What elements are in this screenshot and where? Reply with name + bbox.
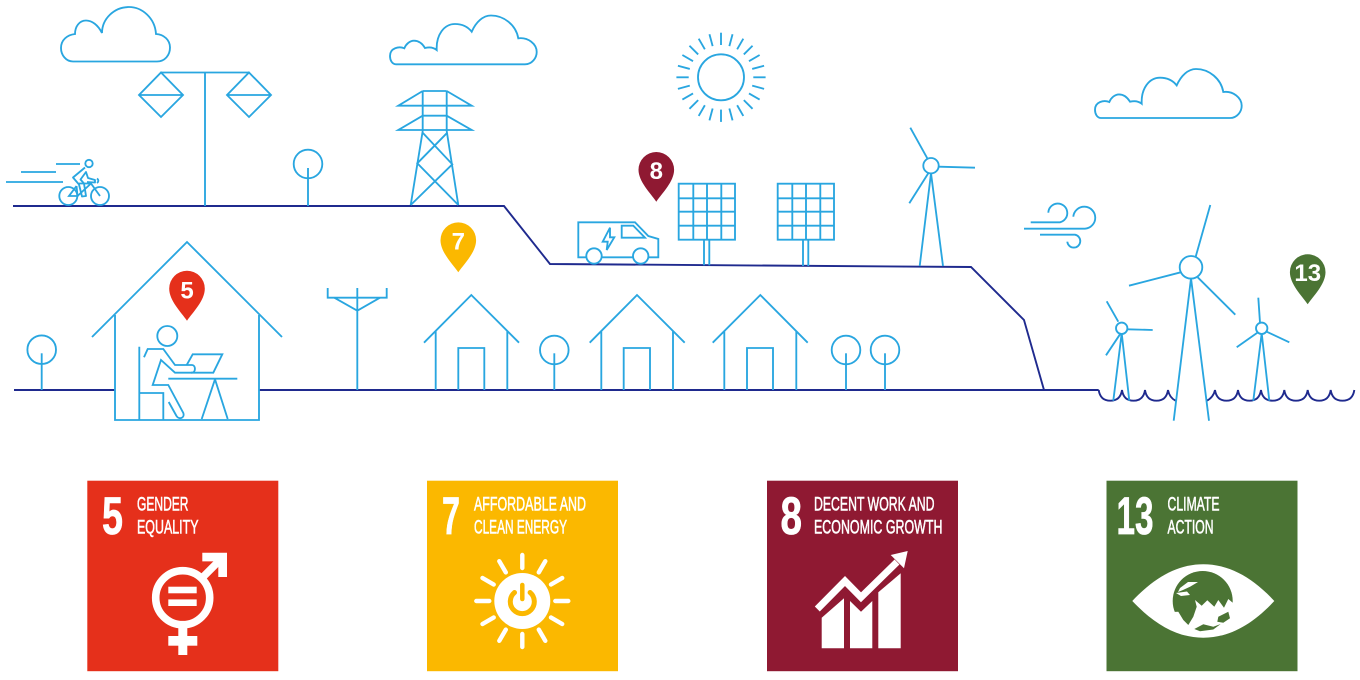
goal title: AFFORDABLE AND — [474, 495, 586, 516]
icon: utility pole — [328, 288, 387, 390]
icon: solar panel 1 — [679, 184, 735, 265]
map pin: goal 5 — [169, 271, 205, 321]
map pin: goal 8: 8 — [650, 158, 663, 185]
panel: SDG 8 decent work and economic growth — [767, 481, 958, 671]
goal title: EQUALITY — [137, 517, 199, 538]
icon: sun — [676, 33, 766, 122]
goal title — [137, 495, 199, 538]
icon: electricity pylon — [398, 91, 472, 205]
goal number 5: 5 — [102, 487, 123, 546]
icon: cyclist with speed lines — [6, 160, 109, 205]
icon: offshore turbine small right — [1237, 298, 1289, 401]
icon: offshore turbine small left — [1106, 301, 1153, 401]
goal title: ACTION — [1168, 517, 1214, 538]
icon: sun with power button — [476, 555, 568, 647]
goal title: GENDER — [137, 495, 188, 516]
goal title — [1168, 495, 1220, 538]
ground line: upper terrain — [13, 206, 1099, 390]
map pin: goal 5: 5 — [180, 277, 194, 304]
goal title: DECENT WORK AND — [814, 495, 934, 516]
map pin: goal 8 — [638, 152, 674, 202]
goal number 13: 13 — [1116, 487, 1154, 546]
panel: SDG 5 gender equality — [87, 481, 278, 671]
icon: woman working in house — [92, 242, 282, 420]
cloud: centre — [390, 16, 537, 64]
icon: tree left — [27, 335, 56, 390]
icon: wind gust — [1024, 204, 1095, 248]
map pin: goal 13: 13 — [1294, 260, 1321, 287]
icon: eye with globe — [1132, 564, 1274, 638]
goal title: CLIMATE — [1168, 495, 1220, 516]
waves — [1099, 390, 1354, 401]
goal title: CLEAN ENERGY — [474, 517, 567, 538]
panel: SDG 13 climate action — [1106, 481, 1298, 671]
icon: tree by lamp — [294, 150, 322, 206]
map pin: goal 7 — [440, 222, 476, 272]
icon: growth chart — [817, 551, 908, 648]
icon: offshore turbine large — [1129, 205, 1235, 421]
cloud: right — [1095, 69, 1242, 118]
map pin: goal 7: 7 — [452, 228, 465, 256]
map pin: goal 13 — [1290, 254, 1326, 304]
goal title — [474, 495, 586, 538]
goal number 7: 7 — [442, 487, 460, 546]
icon: house 2 — [590, 295, 685, 390]
goal title: ECONOMIC GROWTH — [814, 517, 942, 538]
icon: trees pair — [832, 336, 899, 390]
icon: electric van — [578, 222, 658, 264]
cloud: left — [61, 7, 170, 62]
panel: SDG 7 affordable and clean energy — [427, 481, 618, 671]
goal number 8: 8 — [780, 487, 802, 546]
goal title — [814, 495, 942, 538]
icon: house 3 — [713, 295, 808, 390]
icon: gender equality symbol — [156, 553, 227, 655]
icon: wind turbine on hill — [909, 128, 975, 266]
icon: house 1 — [424, 295, 519, 390]
ground line: lower terrain — [14, 389, 1044, 391]
icon: tree between houses — [540, 336, 569, 390]
icon: solar panel 2 — [778, 184, 834, 266]
icon: street lamp — [139, 72, 271, 206]
